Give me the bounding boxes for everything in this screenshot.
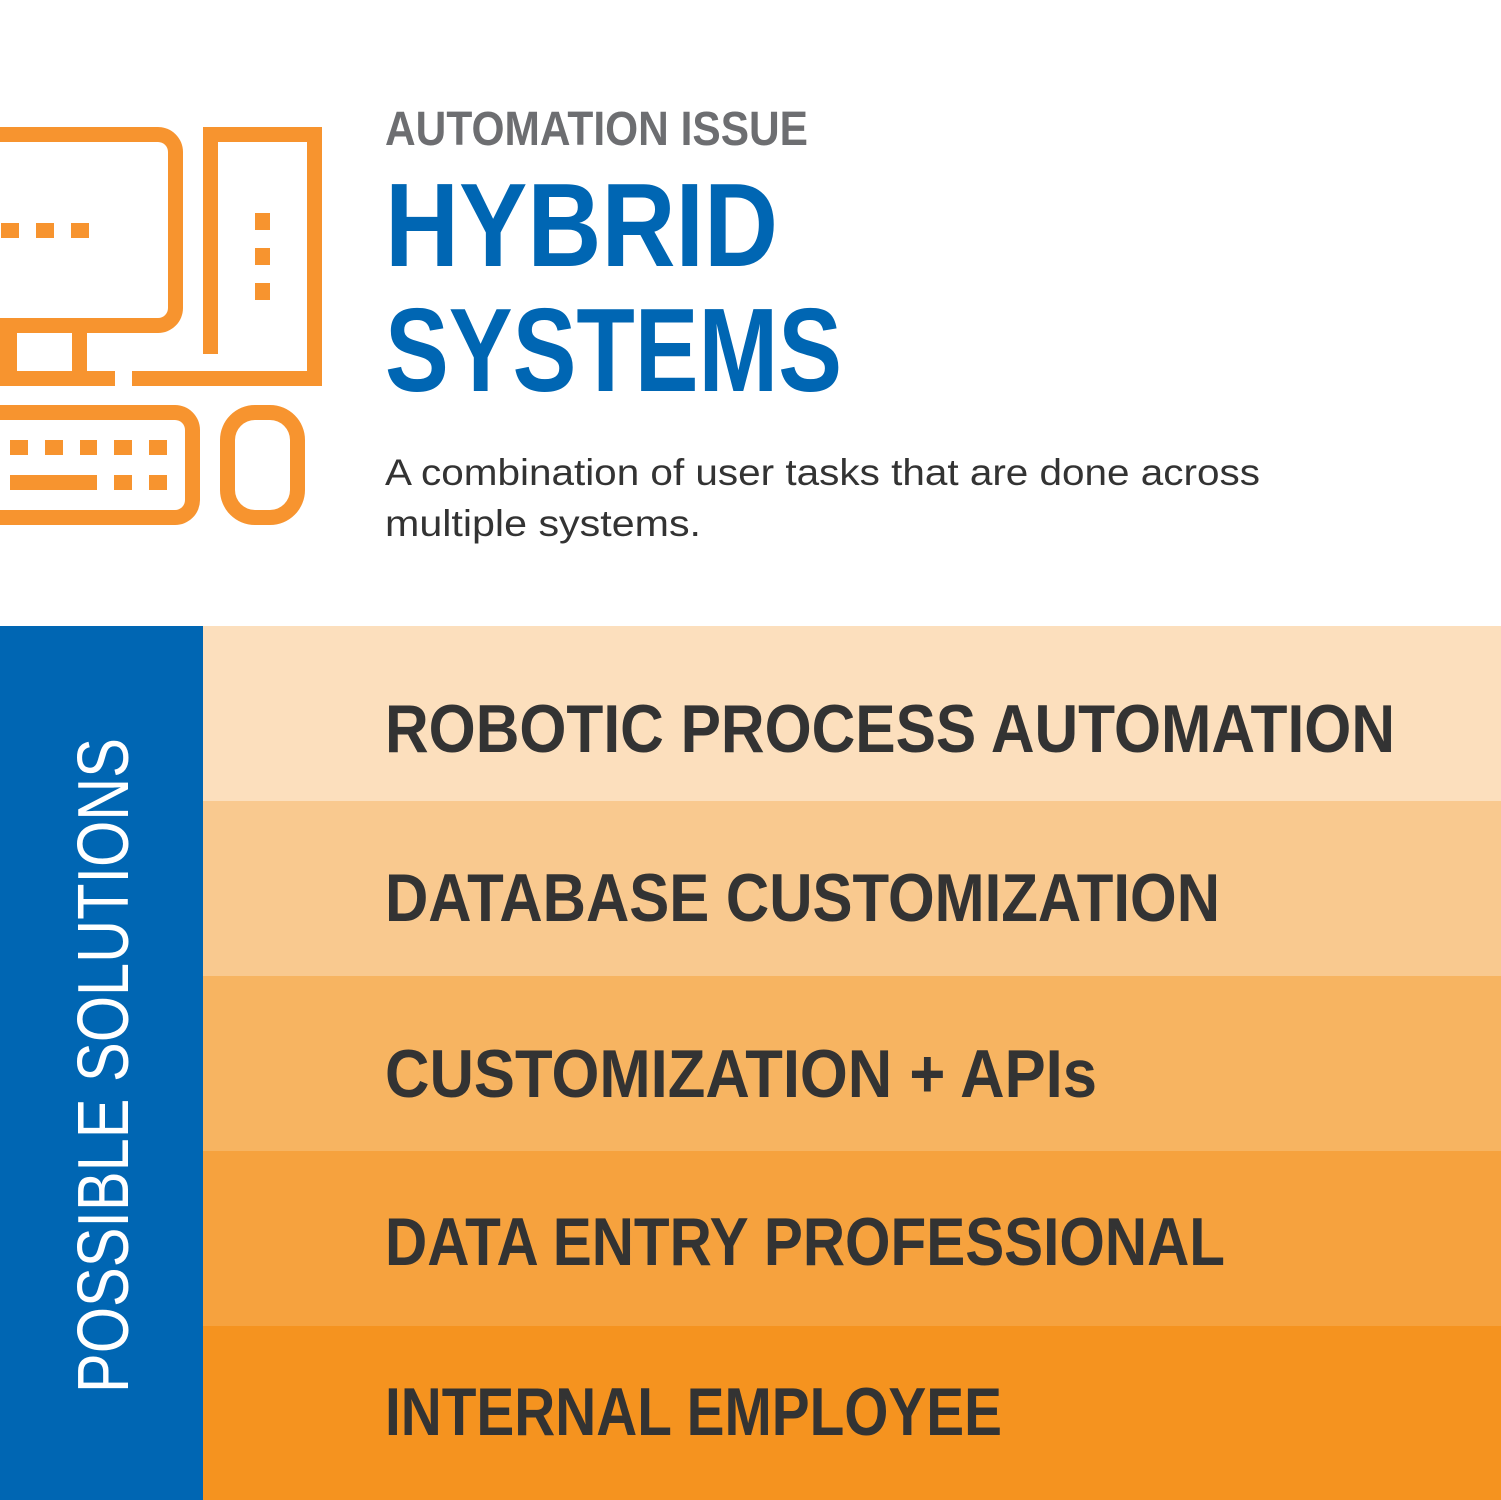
icon: tower	[132, 127, 322, 386]
title	[385, 159, 842, 417]
icon: mouse	[220, 405, 305, 525]
title: HYBRID	[385, 159, 778, 292]
solution 5: INTERNAL EMPLOYEE	[385, 1374, 1002, 1450]
description: A combination of user tasks that are done across	[385, 452, 1260, 493]
solution 5	[203, 1326, 1501, 1500]
description: multiple systems.	[385, 503, 701, 544]
solution 3	[203, 976, 1501, 1151]
solution 4: DATA ENTRY PROFESSIONAL	[385, 1204, 1225, 1280]
solution 2: DATABASE CUSTOMIZATION	[385, 860, 1220, 936]
panel: solutions list	[203, 626, 1501, 1500]
icon: monitor	[0, 127, 183, 386]
solution 1: ROBOTIC PROCESS AUTOMATION	[385, 691, 1395, 767]
description	[385, 452, 1260, 544]
panel: possible solutions label: POSSIBLE SOLUTIONS	[64, 738, 144, 1393]
icon: computer	[0, 127, 322, 525]
panel: possible solutions label	[0, 626, 203, 1500]
solution 2	[203, 801, 1501, 976]
solution 3: CUSTOMIZATION + APIs	[385, 1036, 1097, 1112]
solution 1	[203, 626, 1501, 801]
icon: keyboard	[0, 405, 200, 525]
solution 4	[203, 1151, 1501, 1326]
subtitle: AUTOMATION ISSUE	[385, 103, 808, 156]
title: SYSTEMS	[385, 284, 842, 417]
